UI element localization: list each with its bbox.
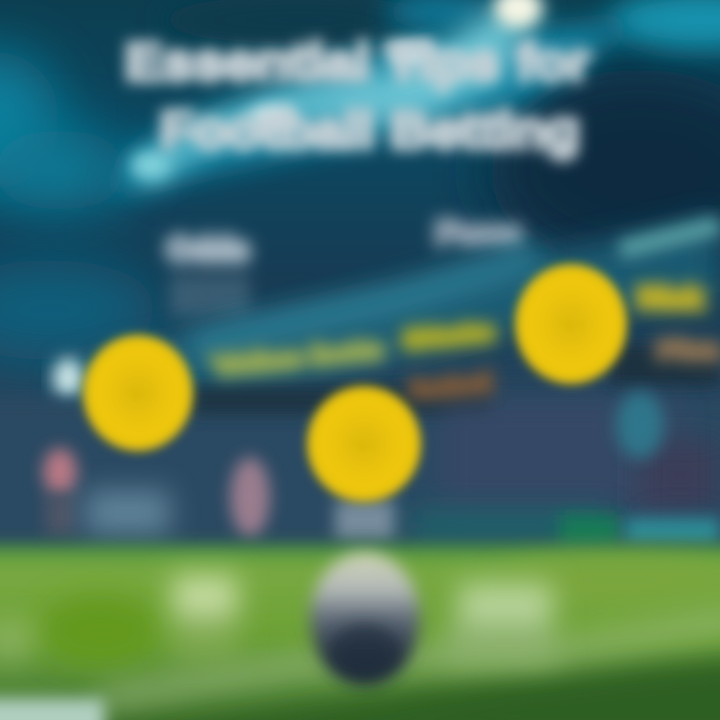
stat label: left column: Odds [167, 231, 249, 267]
football pitch [0, 545, 720, 720]
pitch marker: left [172, 575, 238, 659]
orange ticker text: banner: Plan [658, 337, 720, 364]
football [310, 552, 420, 684]
title: Football Betting [160, 101, 580, 160]
yellow ticker text: banner: Stats [402, 316, 495, 355]
title: Essential Tips for [125, 33, 590, 92]
yellow ticker text: banner: Risk [637, 282, 703, 315]
stat label: right column: Form [436, 215, 522, 251]
yellow circle: left [83, 335, 193, 451]
yellow circle: right [515, 264, 627, 384]
orange ticker text: banner [409, 337, 720, 403]
yellow circle: left: Tip 1 [125, 387, 151, 401]
title [125, 33, 590, 160]
lightning streak [130, 0, 545, 185]
background: stormy sky [0, 0, 720, 560]
yellow circle: right: Tip 3 [558, 318, 584, 332]
stands and crowd [0, 345, 720, 545]
orange ticker text: banner: Bankroll [409, 369, 493, 403]
yellow ticker text: banner: Value bets [212, 333, 384, 381]
stadium banner [53, 215, 720, 420]
yellow ticker text: banner [212, 282, 703, 381]
yellow circle: center: Tip 2 [351, 438, 377, 452]
yellow circle: center [307, 386, 421, 502]
pitch marker: right [445, 583, 555, 662]
stat label: left column [167, 231, 250, 317]
